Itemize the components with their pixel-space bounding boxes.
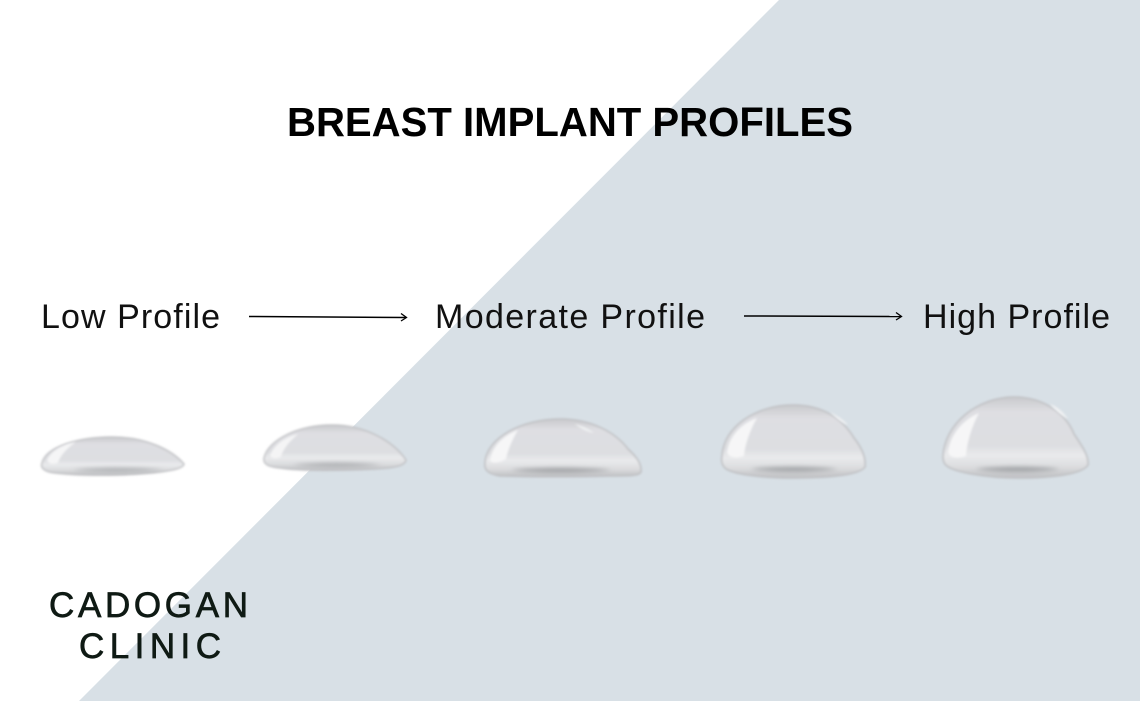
label: low profile: Low Profile xyxy=(41,298,220,336)
implant: moderate profile 2 xyxy=(722,405,865,478)
arrow: moderate to high xyxy=(744,312,902,320)
arrow: low to moderate xyxy=(249,314,406,321)
label: moderate profile: Moderate Profile xyxy=(435,298,705,336)
logo: Cadogan Clinic: CADOGAN xyxy=(49,586,248,625)
implant: high profile xyxy=(943,397,1088,478)
implant: low profile 1 xyxy=(42,437,184,475)
implant: low profile 2 xyxy=(264,425,406,470)
title: BREAST IMPLANT PROFILES xyxy=(287,99,853,145)
implant: moderate profile 1 xyxy=(485,419,641,477)
logo: Cadogan Clinic: CLINIC xyxy=(79,627,221,666)
logo: Cadogan Clinic xyxy=(49,586,248,666)
label: high profile: High Profile xyxy=(923,298,1110,336)
